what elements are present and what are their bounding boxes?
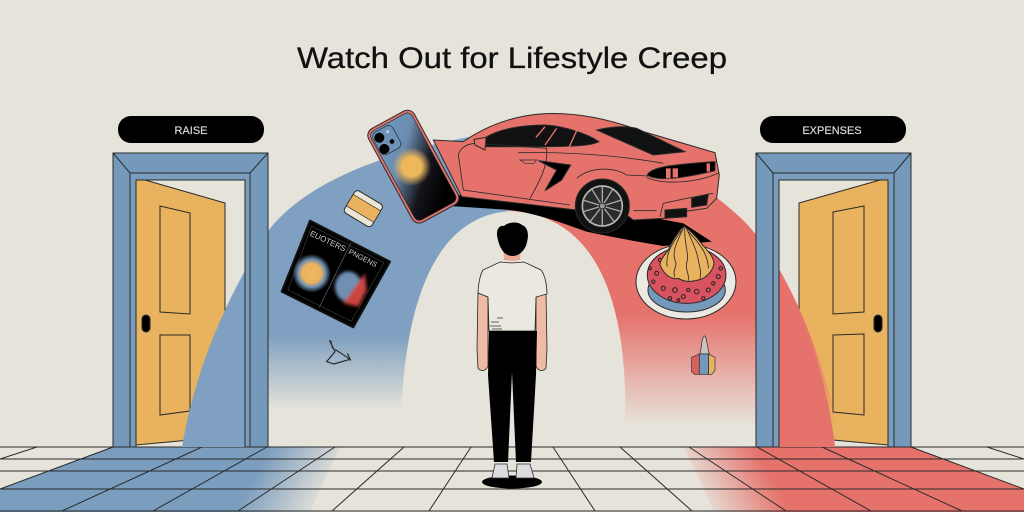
title: Watch Out for Lifestyle Creep (297, 42, 727, 75)
icon: car (433, 113, 719, 233)
person shadow (482, 476, 542, 488)
arc: red expenses path (510, 198, 835, 447)
shoes (492, 464, 534, 478)
pants (488, 331, 537, 462)
panel: raise door leaf (136, 180, 245, 447)
person (477, 222, 547, 488)
raise door frame (113, 153, 268, 447)
label: expenses: EXPENSES (802, 125, 862, 137)
icon: phone (365, 107, 462, 226)
floor (0, 447, 1024, 512)
icon: scribble (327, 340, 351, 364)
neck (503, 245, 521, 261)
expenses door frame (756, 153, 911, 447)
label: expenses (760, 116, 906, 143)
arc: blue raise path (182, 130, 512, 447)
icon: small card (343, 189, 384, 228)
icon: streaming card: EUOTERS (308, 229, 347, 253)
panel: expenses door leaf (779, 180, 888, 447)
icon: cake (636, 226, 736, 319)
icon: streaming card: PNGENS (347, 247, 379, 269)
icon: small bag (692, 336, 715, 374)
label: raise (118, 116, 264, 143)
label: raise: RAISE (174, 125, 208, 137)
icon: streaming card (282, 221, 390, 327)
shirt (478, 262, 547, 331)
shirt wrinkles (490, 318, 503, 329)
arms (477, 293, 547, 370)
car shadow (430, 195, 712, 246)
hair (497, 222, 528, 256)
